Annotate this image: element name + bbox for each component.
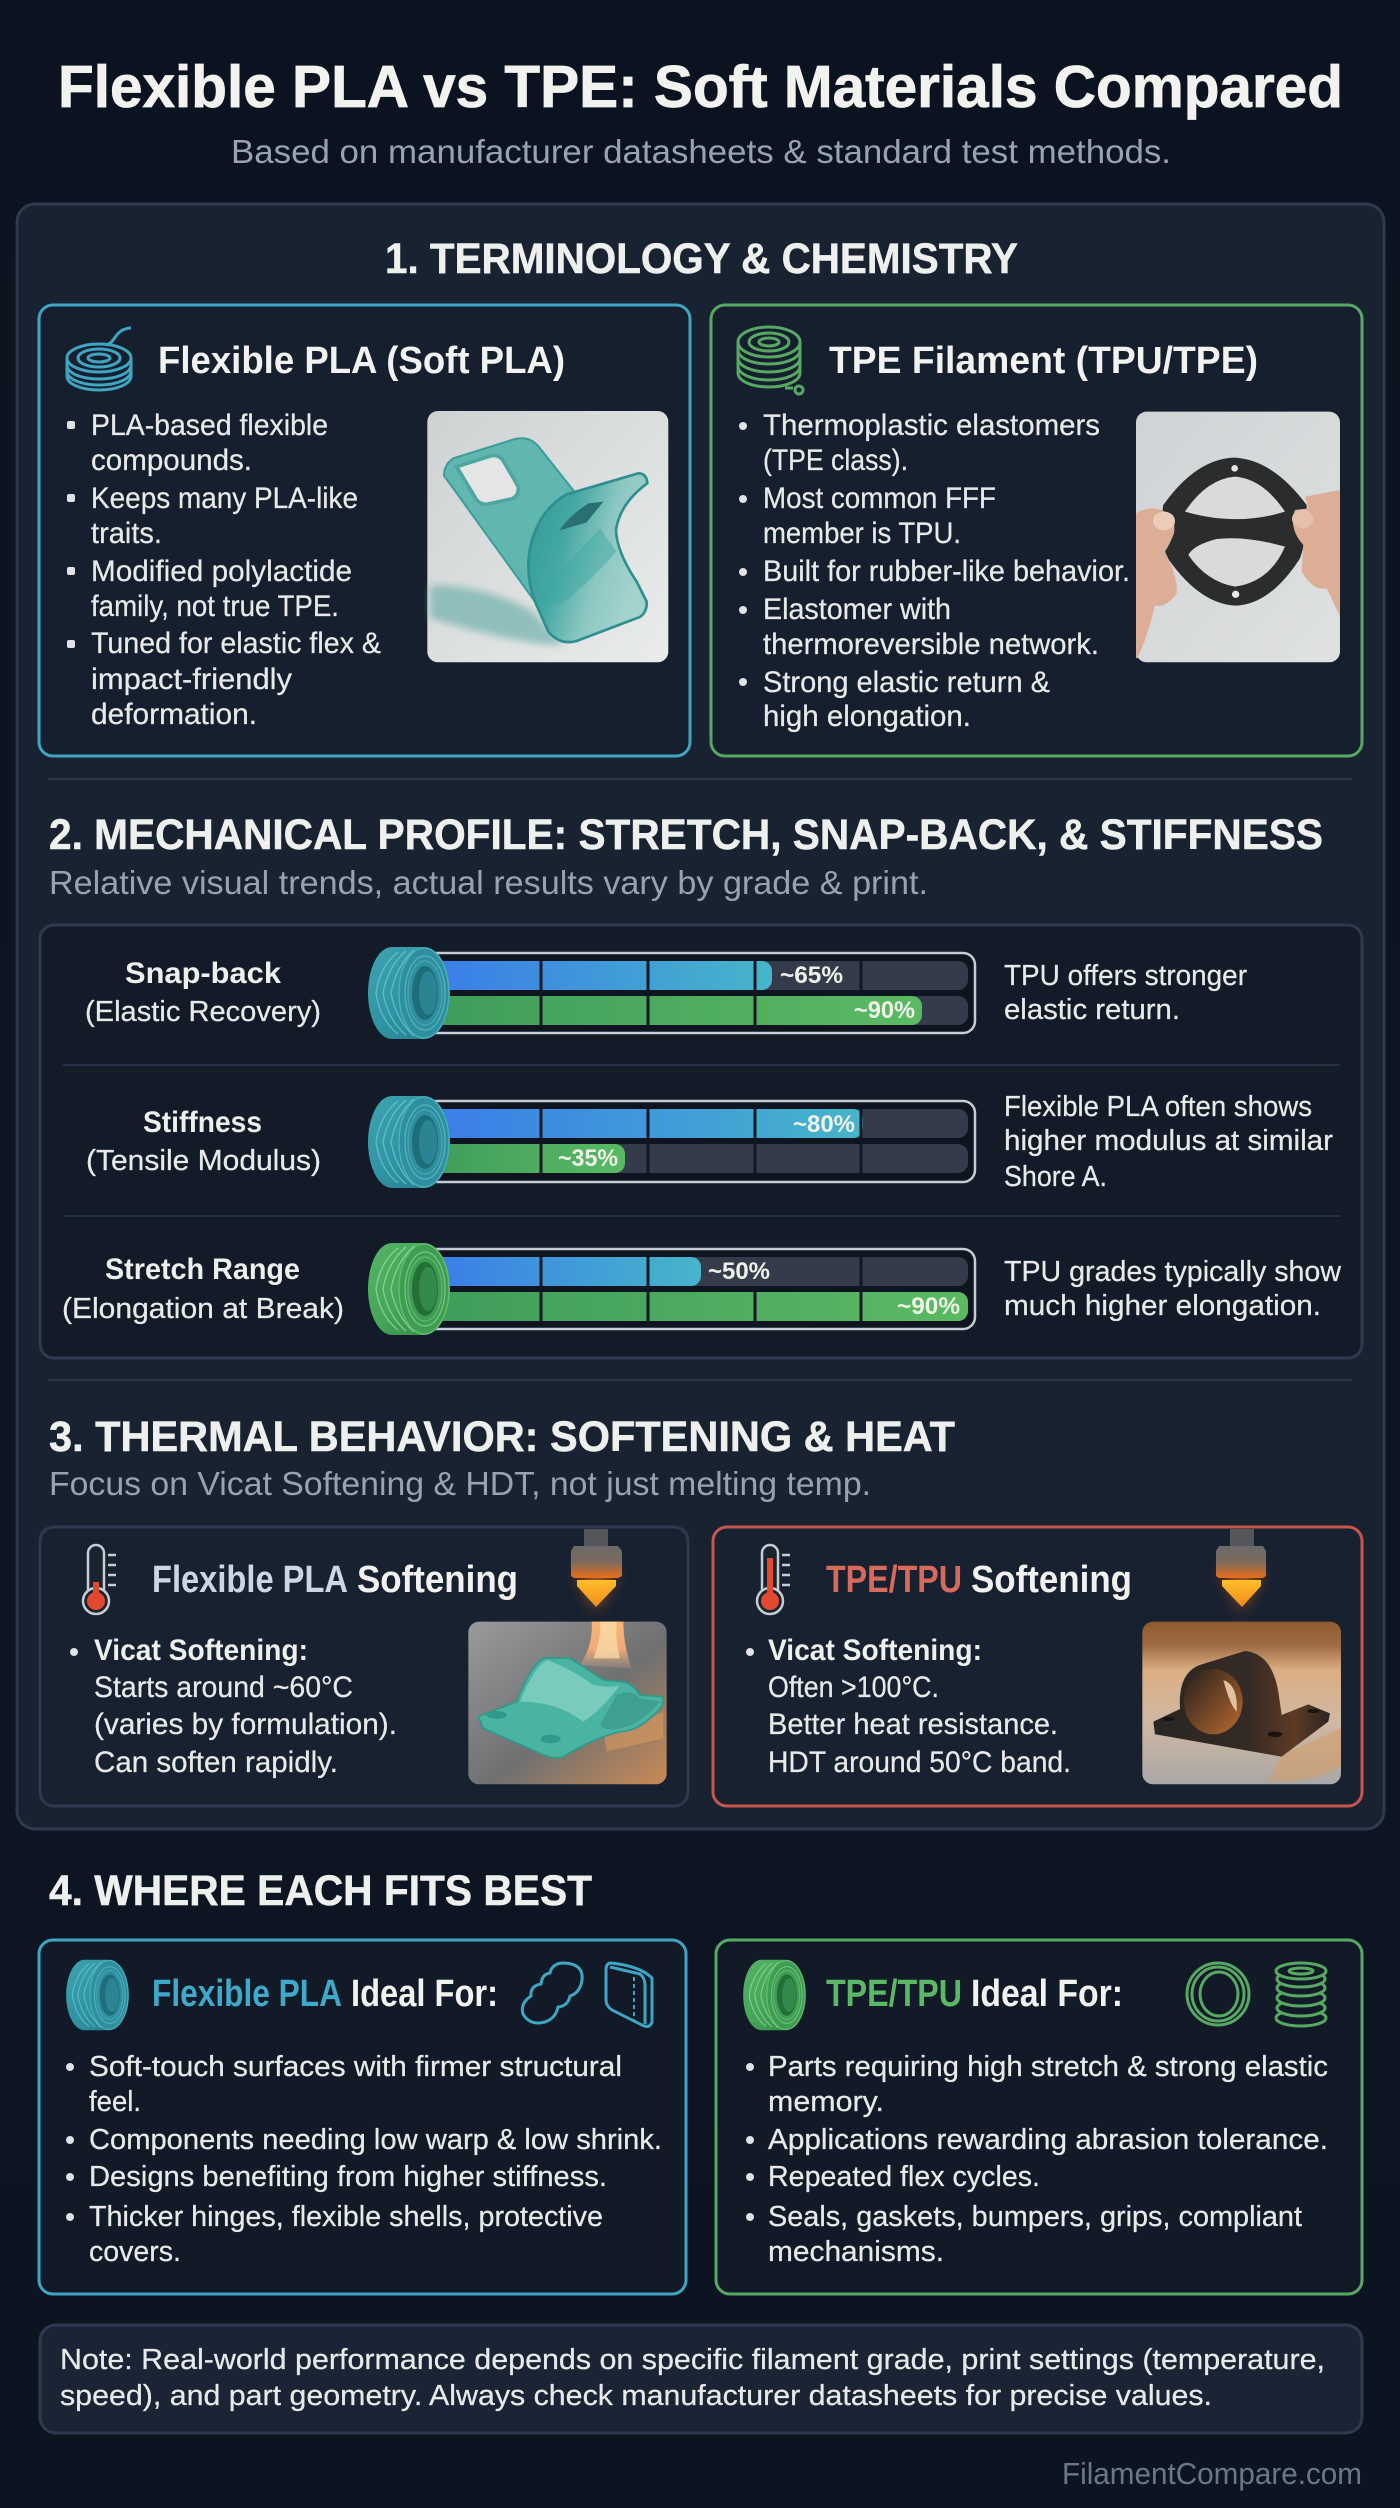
heading: TPE/TPU Softening: Softening <box>971 1559 1132 1601</box>
panel: sections 1 to 3 background <box>17 204 1384 1829</box>
bullet list: TPE/TPU uses <box>746 2051 1328 2268</box>
label: stretch range <box>62 1253 344 1325</box>
heading: TPE/TPU Ideal For <box>826 1973 1123 2015</box>
panel: TPE filament terminology <box>711 305 1362 756</box>
icon: green spool <box>743 1960 806 2030</box>
bullet list: Flexible PLA: Modified polylactide <box>91 555 352 588</box>
icon: protective case outline <box>606 1963 652 2026</box>
bullet list: TPE: thermoreversible network. <box>763 628 1099 661</box>
bullet list: Flexible PLA <box>67 409 381 731</box>
heading: TPE/TPU Softening <box>826 1559 1132 1601</box>
divider: section 1 and 2 <box>48 778 1352 780</box>
bullet list: Flexible PLA uses: Designs benefiting from higher stiffness. <box>89 2161 607 2193</box>
bullet list: Flexible PLA: family, not true TPE. <box>91 590 339 623</box>
note: snap-back: elastic return. <box>1004 994 1180 1026</box>
subtitle: Based on manufacturer datasheets & standard test methods. <box>231 133 1171 170</box>
bullet list: Flexible PLA: PLA-based flexible <box>91 409 328 442</box>
label: stretch range: Stretch Range <box>105 1253 300 1286</box>
bullet: Flexible PLA Vicat softening: Can soften rapidly. <box>94 1746 338 1779</box>
bullet list: TPE: high elongation. <box>763 700 971 733</box>
bullet list: TPE/TPU uses: Seals, gaskets, bumpers, grips, compliant <box>768 2201 1302 2233</box>
bullet list: TPE: Built for rubber-like behavior. <box>763 555 1130 588</box>
icon: green filament coil <box>738 327 803 394</box>
bullet list: Flexible PLA: compounds. <box>91 444 252 477</box>
bullet list: Flexible PLA uses: feel. <box>89 2086 141 2118</box>
panel: mechanical comparison chart <box>40 925 1362 1358</box>
note: snap-back: TPU offers stronger <box>1004 960 1247 992</box>
label: stiffness: Stiffness <box>143 1106 262 1139</box>
bullet list: Flexible PLA uses: covers. <box>89 2236 181 2268</box>
icon: concentric ring seal <box>1187 1963 1249 2025</box>
panel: TPE/TPU ideal uses <box>716 1940 1362 2294</box>
bullet: Flexible PLA Vicat softening: Starts around ~60°C <box>94 1671 353 1704</box>
heading: TPE/TPU Ideal For: Ideal For: <box>971 1973 1123 2015</box>
bullet list: TPE: Most common FFF <box>763 482 996 515</box>
image: softening teal part with flame <box>468 1622 667 1784</box>
icon: hot nozzle <box>571 1529 622 1610</box>
bar chart: stretch range: ~50% <box>708 1258 770 1285</box>
label: stretch range: (Elongation at Break) <box>62 1293 344 1325</box>
subheading: section 3: Focus on Vicat Softening & HDT, not just melting temp. <box>49 1465 871 1502</box>
heading: Flexible PLA Ideal For: Flexible PLA <box>152 1973 342 2015</box>
icon: blue filament coil <box>67 328 131 390</box>
footer: source site: FilamentCompare.com <box>1062 2456 1362 2491</box>
bullet list: TPE/TPU uses: mechanisms. <box>768 2236 944 2268</box>
panel: Flexible PLA ideal uses <box>39 1940 686 2294</box>
callout: note <box>40 2325 1362 2433</box>
icon: blob gasket outline <box>522 1963 582 2023</box>
bullet list: Flexible PLA: Keeps many PLA-like <box>91 482 358 515</box>
bullet list: Flexible PLA: deformation. <box>91 698 257 731</box>
heading: Flexible PLA Ideal For: Ideal For: <box>351 1973 498 2015</box>
bullet list: Flexible PLA uses: Components needing low warp & low shrink. <box>89 2124 662 2156</box>
bullet list: Flexible PLA: traits. <box>91 517 162 550</box>
bullet list: Flexible PLA uses <box>66 2051 662 2268</box>
heading: TPE/TPU Softening: TPE/TPU <box>826 1559 962 1601</box>
icon: stacked rings <box>1276 1963 1326 2026</box>
bullet list: TPE/TPU uses: Parts requiring high stretch & strong elastic <box>768 2051 1328 2083</box>
row: stretch range <box>62 1243 1342 1335</box>
row: snap-back <box>85 947 1247 1039</box>
note: snap-back <box>1004 960 1247 1026</box>
subheading: section 2: Relative visual trends, actual results vary by grade & print. <box>49 864 928 901</box>
callout: note: Note: Real-world performance depends on specific filament grade, print settings (temperature, <box>60 2344 1325 2376</box>
label: snap-back <box>85 957 321 1028</box>
bar chart: stiffness: ~35% <box>558 1145 618 1172</box>
bullet: TPE/TPU Vicat softening: Often >100°C. <box>768 1671 939 1704</box>
heading: section 4: 4. WHERE EACH FITS BEST <box>49 1867 592 1915</box>
panel: Flexible PLA terminology <box>39 305 690 756</box>
heading: section 3: 3. THERMAL BEHAVIOR: SOFTENING & HEAT <box>49 1413 955 1461</box>
heading: Flexible PLA Ideal For <box>152 1973 498 2015</box>
bullet: Flexible PLA Vicat softening: (varies by formulation). <box>94 1708 397 1741</box>
bar chart: snap-back: ~65% <box>780 962 843 989</box>
note: stretch range: much higher elongation. <box>1004 1290 1321 1322</box>
bullet list: Flexible PLA: impact-friendly <box>91 663 292 696</box>
bullet: TPE/TPU Vicat softening: HDT around 50°C band. <box>768 1746 1071 1779</box>
heading: Flexible PLA (Soft PLA): Flexible PLA (Soft PLA) <box>158 340 565 382</box>
bullet list: TPE: Strong elastic return & <box>763 666 1050 699</box>
image: hands stretching black gasket <box>1136 412 1340 662</box>
bar chart: stiffness: ~80% <box>793 1111 855 1138</box>
bar chart: stretch range <box>368 1243 975 1335</box>
heading: section 2: 2. MECHANICAL PROFILE: STRETCH, SNAP-BACK, & STIFFNESS <box>49 811 1323 859</box>
title: Flexible PLA vs TPE: Soft Materials Compared <box>58 54 1343 120</box>
bullet: Flexible PLA Vicat softening <box>70 1634 397 1779</box>
heading: TPE Filament (TPU/TPE): TPE Filament (TPU/TPE) <box>829 340 1258 382</box>
panel: Flexible PLA softening <box>40 1527 688 1806</box>
note: stiffness: Shore A. <box>1004 1161 1107 1193</box>
icon: hot nozzle <box>1216 1529 1266 1610</box>
label: stiffness: (Tensile Modulus) <box>86 1145 321 1177</box>
icon: teal spool <box>368 947 450 1039</box>
note: stiffness: Flexible PLA often shows <box>1004 1091 1312 1123</box>
bullet list: Flexible PLA uses: Thicker hinges, flexible shells, protective <box>89 2201 603 2233</box>
heading: Flexible PLA Softening: Softening <box>357 1559 518 1601</box>
bar chart: stretch range: ~90% <box>897 1293 960 1320</box>
panel: TPE/TPU softening <box>713 1527 1362 1806</box>
bullet list: TPE/TPU uses: Applications rewarding abrasion tolerance. <box>768 2124 1328 2156</box>
bullet list: TPE: member is TPU. <box>763 517 961 550</box>
note: stretch range: TPU grades typically show <box>1004 1256 1342 1288</box>
bar chart: stiffness <box>368 1096 975 1188</box>
heading: Flexible PLA Softening: Flexible PLA <box>152 1559 348 1601</box>
callout: note: speed), and part geometry. Always check manufacturer datasheets for precise values. <box>60 2380 1212 2412</box>
icon: green spool <box>368 1243 450 1335</box>
bullet list: TPE: (TPE class). <box>763 444 908 477</box>
bullet list: TPE/TPU uses: Repeated flex cycles. <box>768 2161 1040 2193</box>
bar chart: snap-back: ~90% <box>854 997 915 1024</box>
note: stiffness <box>1004 1091 1333 1193</box>
heading: section 1: 1. TERMINOLOGY & CHEMISTRY <box>385 235 1018 283</box>
heading: TPE/TPU Ideal For: TPE/TPU <box>826 1973 962 2015</box>
bullet list: Flexible PLA uses: Soft-touch surfaces with firmer structural <box>89 2051 622 2083</box>
image: black bracket <box>1142 1622 1341 1784</box>
icon: teal spool <box>66 1960 129 2030</box>
label: snap-back: Snap-back <box>125 957 281 990</box>
bullet list: Flexible PLA: Tuned for elastic flex & <box>91 627 381 660</box>
bullet: TPE/TPU Vicat softening: Better heat resistance. <box>768 1708 1058 1741</box>
icon: thermometer <box>83 1545 116 1614</box>
label: stiffness <box>86 1106 321 1177</box>
row: stiffness <box>86 1091 1333 1193</box>
bar chart: snap-back <box>368 947 975 1039</box>
bullet list: TPE/TPU uses: memory. <box>768 2086 884 2118</box>
note: stiffness: higher modulus at similar <box>1004 1125 1333 1157</box>
label: snap-back: (Elastic Recovery) <box>85 996 321 1028</box>
note: stretch range <box>1004 1256 1342 1322</box>
bullet list: TPE: Thermoplastic elastomers <box>763 409 1100 442</box>
icon: thermometer <box>757 1545 790 1614</box>
bullet list: TPE <box>739 409 1130 733</box>
heading: Flexible PLA Softening <box>152 1559 518 1601</box>
bullet: Flexible PLA Vicat softening: Vicat Softening: <box>94 1634 308 1667</box>
bullet: TPE/TPU Vicat softening: Vicat Softening: <box>768 1634 982 1667</box>
bullet list: TPE: Elastomer with <box>763 593 951 626</box>
image: bent teal phone case <box>427 411 668 662</box>
divider: section 2 and 3 <box>48 1379 1352 1381</box>
icon: teal spool <box>368 1096 450 1188</box>
bullet: TPE/TPU Vicat softening <box>746 1634 1071 1779</box>
